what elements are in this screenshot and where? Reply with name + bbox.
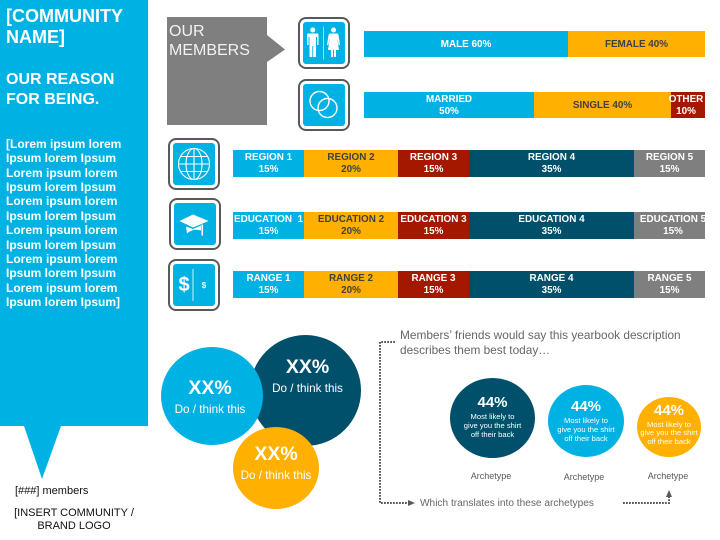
bar chart: marital status: OTHER: [669, 94, 703, 104]
bar chart: region: 35%: [542, 164, 561, 175]
bar chart: region: REGION 4: [528, 152, 575, 163]
circle: blue archetype stat: [548, 385, 624, 457]
bar chart: marital status: 50%: [439, 106, 459, 116]
bar chart: range: RANGE 2: [329, 273, 373, 284]
bar chart: education: 20%: [341, 226, 361, 237]
bar chart: region: 15%: [424, 164, 443, 175]
bar chart: range: RANGE 4: [530, 273, 573, 284]
bar chart: range: 15%: [259, 285, 278, 296]
text block: lorem ipsum: Ipsum lorem Ipsum: [6, 238, 116, 252]
circle: blue archetype stat: Most likely to: [564, 416, 608, 425]
icon: globe: [168, 138, 220, 190]
circle: dark archetype stat: Most likely to: [471, 412, 514, 420]
bar chart: gender: [364, 31, 705, 57]
bar chart: range: RANGE 5: [648, 273, 691, 284]
bar chart: education: 15%: [259, 226, 278, 237]
bar chart: education: EDUCATION 1: [234, 214, 303, 225]
bar chart: range: 15%: [424, 285, 443, 296]
label: archetype one: Archetype: [471, 471, 511, 481]
bar chart: marital status: [364, 92, 705, 118]
text block: yearbook description: Members’ friends would say this yearbook description: [400, 328, 681, 342]
bar chart: gender: MALE 60%: [441, 38, 491, 50]
bar chart: range: 20%: [341, 285, 361, 296]
arrow: dotted connector to archetypes caption: [379, 341, 415, 506]
text block: lorem ipsum: Lorem ipsum lorem: [6, 194, 117, 208]
bar chart: education: EDUCATION 4: [518, 214, 585, 225]
icon: income range: [168, 259, 220, 311]
bar chart: marital status: SINGLE 40%: [573, 100, 632, 110]
text block: lorem ipsum: Ipsum lorem Ipsum: [6, 209, 116, 223]
text block: lorem ipsum: [6, 137, 121, 309]
circle: dark archetype stat: off their back: [471, 430, 514, 438]
circle: blue archetype stat: off their back: [564, 434, 608, 443]
bar chart: range: RANGE 1: [247, 273, 290, 284]
circle: blue think stat: Do / think this: [175, 402, 245, 416]
bar chart: education: [233, 212, 705, 239]
panel: our members callout: [167, 17, 285, 125]
text block: lorem ipsum: Ipsum lorem Ipsum: [6, 180, 116, 194]
circle: blue archetype stat: give you the shirt: [557, 425, 615, 434]
bar chart: education: 15%: [424, 226, 443, 237]
bar chart: education: EDUCATION 5: [640, 214, 705, 225]
circle: dark think stat: XX%: [286, 356, 329, 378]
member count: [###] members: [15, 485, 88, 497]
text block: lorem ipsum: Ipsum lorem Ipsum: [6, 266, 116, 280]
bar chart: region: 15%: [259, 164, 278, 175]
text block: lorem ipsum: Ipsum lorem Ipsum: [6, 151, 116, 165]
icon: male and female: [298, 17, 350, 69]
text block: lorem ipsum: Lorem ipsum lorem: [6, 252, 117, 266]
bar chart: range: RANGE 3: [412, 273, 455, 284]
heading: our members: MEMBERS: [169, 42, 250, 58]
arrow: dotted connector to orange archetype: [623, 490, 672, 504]
circle: blue think stat: XX%: [188, 376, 232, 398]
icon: income range: $: [178, 274, 189, 296]
circle: orange archetype stat: 44%: [654, 402, 684, 418]
label: archetype three: Archetype: [648, 471, 688, 481]
circle: orange think stat: XX%: [254, 443, 298, 465]
circle: orange archetype stat: [637, 397, 701, 457]
bar chart: region: 20%: [341, 164, 361, 175]
text block: lorem ipsum: Lorem ipsum lorem: [6, 281, 117, 295]
text block: yearbook description: describes them best today…: [400, 342, 550, 356]
panel: sidebar: [0, 0, 148, 479]
bar chart: education: EDUCATION 2: [318, 214, 384, 225]
logo placeholder: BRAND LOGO: [37, 520, 111, 532]
bar chart: region: REGION 1: [245, 152, 292, 163]
circle: dark archetype stat: 44%: [477, 394, 508, 410]
logo placeholder: [14, 507, 134, 532]
heading: community name: [COMMUNITY NAME]: [6, 6, 123, 47]
bar chart: education: 35%: [542, 226, 561, 237]
circle: blue archetype stat: 44%: [571, 398, 601, 414]
bar chart: range: 35%: [542, 285, 561, 296]
circle: orange archetype stat: Most likely to: [647, 420, 691, 428]
text block: yearbook description: [400, 328, 681, 356]
circle: dark archetype stat: [450, 378, 535, 458]
circle: dark archetype stat: give you the shirt: [464, 420, 521, 430]
bar chart: range: 15%: [660, 285, 679, 296]
caption: archetypes translation: Which translates into these archetypes: [420, 498, 594, 509]
bar chart: region: [233, 150, 705, 177]
text block: lorem ipsum: Lorem ipsum lorem: [6, 166, 117, 180]
icon: linked rings: [298, 79, 350, 131]
icon: income range: $: [201, 280, 206, 290]
bar chart: region: REGION 5: [646, 152, 693, 163]
bar chart: marital status: 10%: [676, 106, 696, 116]
circle: dark think stat: [250, 335, 361, 446]
heading: our members: OUR: [169, 23, 205, 40]
heading: our reason for being: OUR REASON FOR BEING.: [6, 71, 114, 108]
bar chart: region: REGION 3: [410, 152, 457, 163]
circle: orange think stat: Do / think this: [241, 468, 311, 482]
circle: orange think stat: [233, 427, 319, 509]
circle: orange archetype stat: give you the shirt: [640, 428, 698, 437]
text block: lorem ipsum: [Lorem ipsum lorem: [6, 137, 121, 151]
text block: lorem ipsum: Ipsum lorem Ipsum]: [6, 295, 120, 309]
heading: our members: [169, 23, 250, 58]
logo placeholder: [INSERT COMMUNITY /: [14, 507, 134, 519]
bar chart: education: EDUCATION 3: [400, 214, 467, 225]
circle: blue think stat: [161, 347, 263, 445]
bar chart: education: 15%: [663, 226, 683, 237]
bar chart: region: REGION 2: [327, 152, 375, 163]
label: archetype two: Archetype: [564, 472, 604, 482]
bar chart: range: [233, 271, 705, 298]
bar chart: region: 15%: [660, 164, 679, 175]
circle: orange archetype stat: off their back: [647, 437, 691, 446]
sidebar background with pointer: [0, 0, 148, 479]
text block: lorem ipsum: Lorem ipsum lorem: [6, 223, 117, 237]
icon: graduation cap: [169, 198, 221, 250]
circle: dark think stat: Do / think this: [272, 382, 343, 395]
bar chart: gender: FEMALE 40%: [605, 38, 668, 50]
bar chart: marital status: MARRIED: [426, 94, 472, 104]
